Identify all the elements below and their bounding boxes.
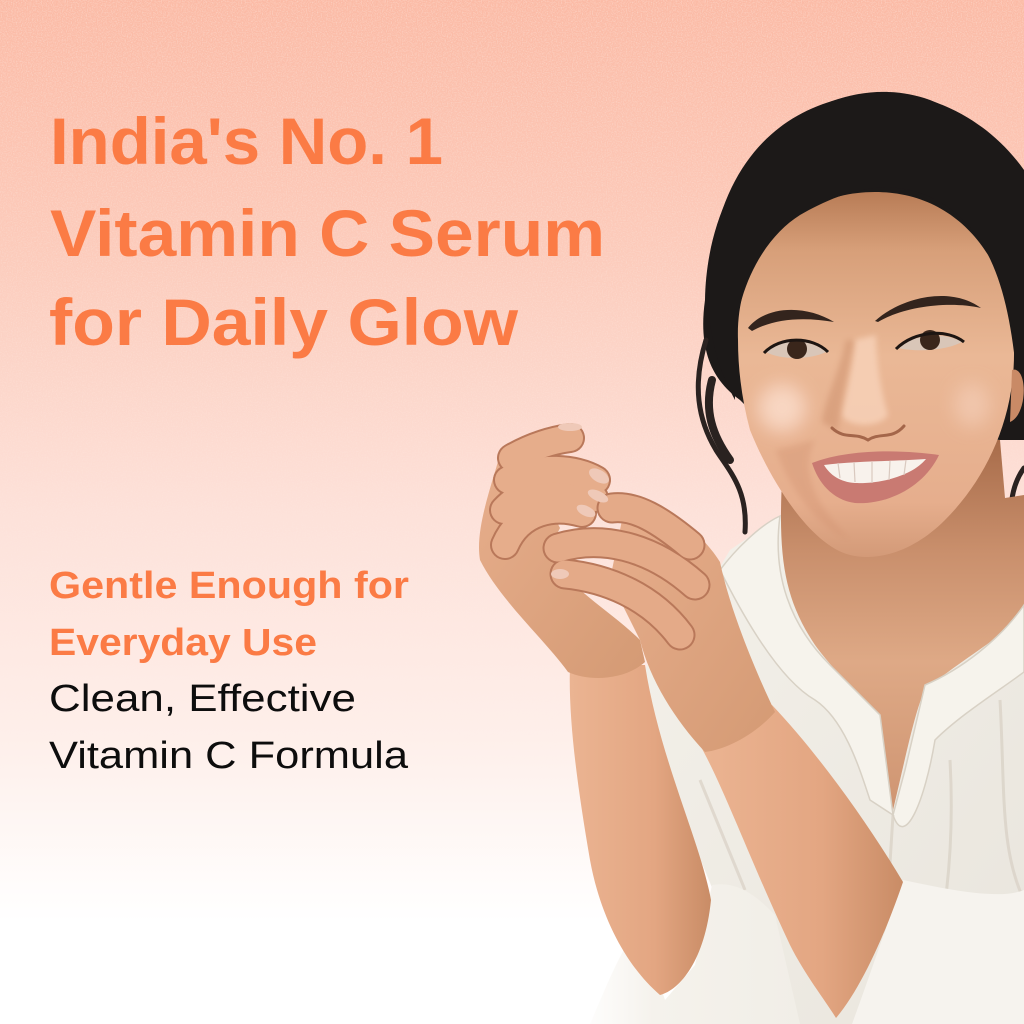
eye left xyxy=(764,339,828,359)
eye right xyxy=(896,330,964,350)
headline: for Daily Glow xyxy=(49,285,519,359)
hand back fingers xyxy=(504,438,596,545)
subheading text block xyxy=(49,565,409,777)
nose side shadow xyxy=(822,340,854,432)
cheek shadow xyxy=(776,440,850,540)
neck xyxy=(781,440,1024,810)
subheading text block: Everyday Use xyxy=(49,622,317,664)
headline xyxy=(49,104,605,359)
ear xyxy=(1010,370,1024,422)
cheek highlight xyxy=(758,384,806,432)
hair back xyxy=(703,92,1024,440)
portrait of woman xyxy=(479,92,1024,1024)
hand front palm xyxy=(610,505,775,752)
headline: India's No. 1 xyxy=(50,104,443,178)
fingernails xyxy=(551,423,612,579)
nose underside xyxy=(832,426,904,440)
hand back palm xyxy=(479,448,645,678)
left sleeve xyxy=(590,884,800,1024)
face xyxy=(738,192,1014,557)
subheading text block: Clean, Effective xyxy=(49,678,356,720)
subheading text block: Gentle Enough for xyxy=(49,565,409,607)
right sleeve xyxy=(852,880,1024,1024)
shirt folds xyxy=(700,700,1024,1024)
nose highlight xyxy=(842,335,888,425)
forearm left xyxy=(570,665,711,995)
hairline xyxy=(708,93,1024,400)
subheading text block: Vitamin C Formula xyxy=(49,735,409,777)
background grain xyxy=(0,0,1024,372)
shirt body xyxy=(645,498,1024,1024)
forearm right xyxy=(700,705,903,1018)
collar xyxy=(720,516,1024,827)
eyebrow right xyxy=(875,296,981,322)
headline: Vitamin C Serum xyxy=(50,196,605,270)
mouth xyxy=(812,451,939,503)
eyebrow left xyxy=(748,310,834,331)
loose hair strands xyxy=(698,340,1024,568)
cheek highlight right xyxy=(954,383,990,427)
hand front fingers xyxy=(558,508,695,635)
